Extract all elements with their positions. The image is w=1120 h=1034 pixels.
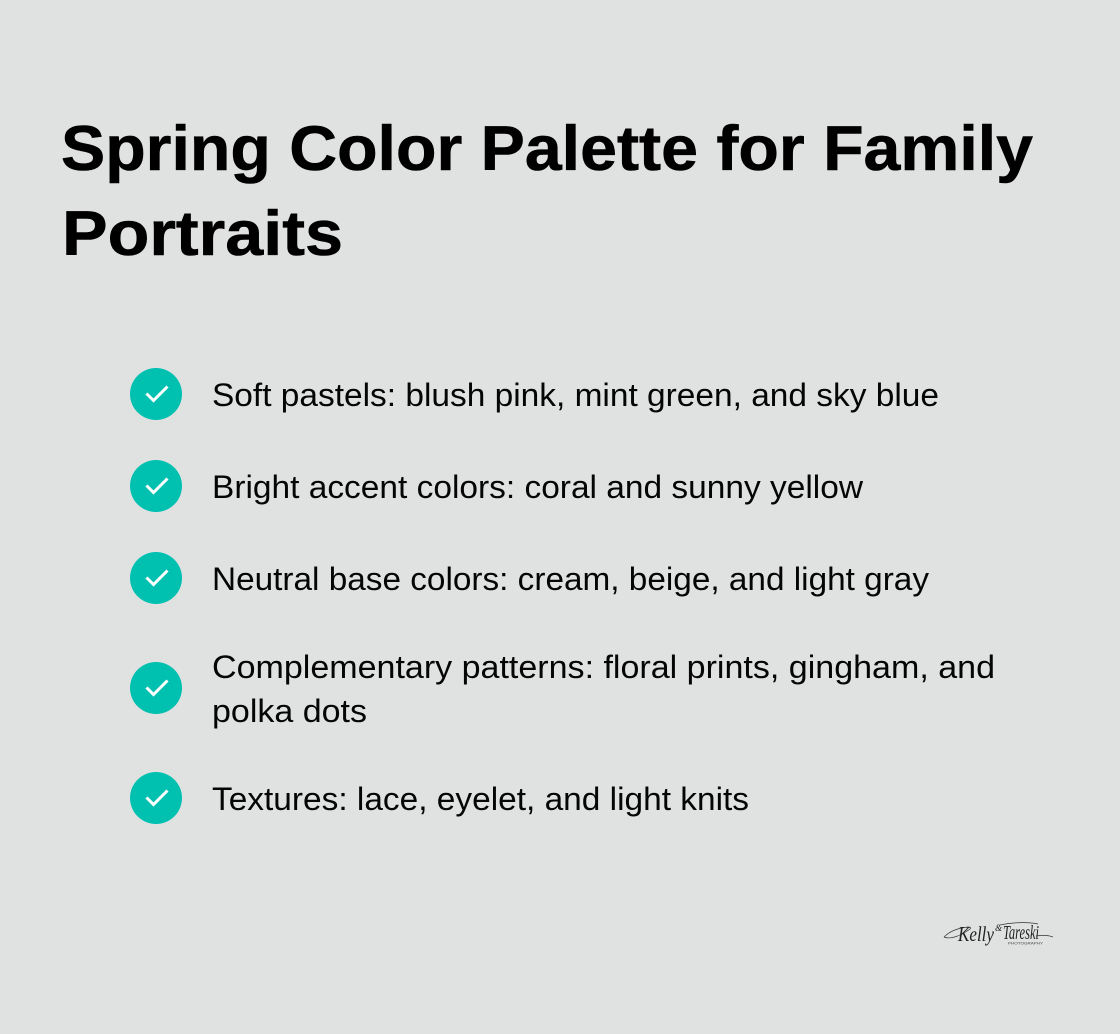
item: complementary patterns: [130, 649, 995, 729]
item: textures: Textures: lace, eyelet, and light knits: [212, 781, 749, 817]
item: textures: [130, 772, 749, 824]
title: [61, 114, 1033, 269]
logo: signature: &: [995, 923, 1002, 933]
item: complementary patterns: polka dots: [212, 693, 367, 729]
logo: signature: Kelly: [957, 922, 995, 946]
checklist: [130, 368, 995, 824]
item: bright accent colors: Bright accent colors: coral and sunny yellow: [212, 469, 864, 505]
logo: signature: Tareski: [1003, 922, 1039, 944]
item: soft pastels: [130, 368, 939, 420]
item: neutral base colors: Neutral base colors: cream, beige, and light gray: [212, 561, 929, 597]
logo: signature: PHOTOGRAPHY: [1008, 942, 1044, 946]
title: Portraits: [62, 199, 343, 269]
logo: signature: [944, 922, 1053, 946]
item: neutral base colors: [130, 552, 929, 604]
item: bright accent colors: [130, 460, 864, 512]
title: Spring Color Palette for Family: [61, 114, 1033, 184]
item: soft pastels: Soft pastels: blush pink, mint green, and sky blue: [212, 377, 939, 413]
item: complementary patterns: Complementary patterns: floral prints, gingham, and: [212, 649, 995, 685]
